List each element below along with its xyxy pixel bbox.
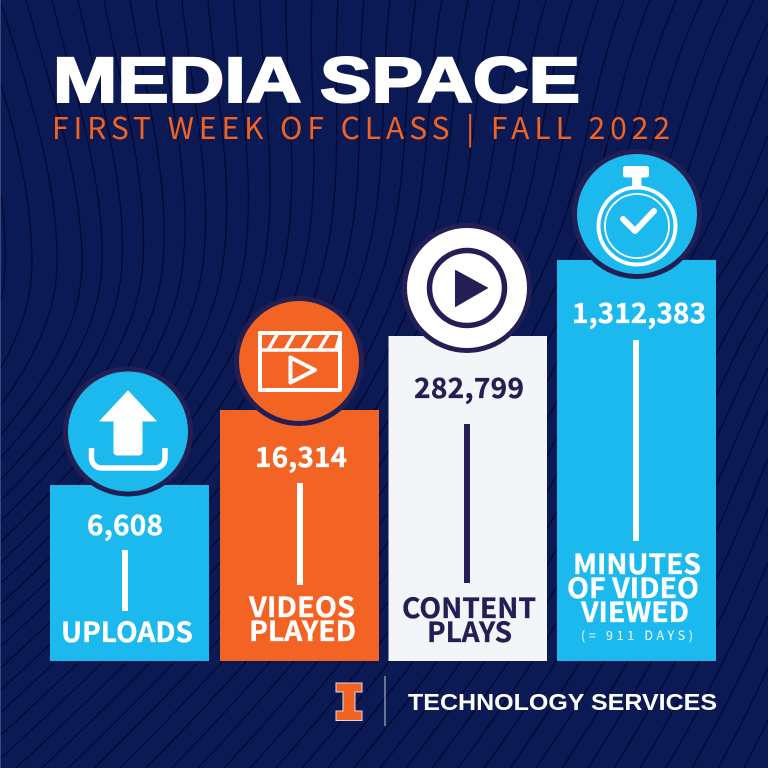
- connector: videos played: [297, 483, 303, 585]
- label: content plays: CONTENT: [402, 587, 536, 627]
- value: content plays: 282,799: [414, 367, 524, 407]
- icon: play button: [404, 226, 530, 350]
- footer logo: block I: [336, 683, 362, 720]
- value: uploads: 6,608: [87, 504, 163, 544]
- label: uploads: UPLOADS: [61, 611, 193, 651]
- connector: uploads: [122, 550, 128, 611]
- label: minutes viewed: VIEWED: [580, 591, 689, 631]
- label: minutes viewed: OF VIDEO: [567, 567, 699, 607]
- panel: minutes viewed: [557, 152, 716, 661]
- footer text: TECHNOLOGY SERVICES: [408, 689, 717, 715]
- label: videos played: PLAYED: [249, 610, 356, 650]
- panel: uploads: [50, 369, 209, 661]
- icon: upload: [66, 369, 190, 494]
- label: videos played: [248, 586, 356, 650]
- icon: video clapper: [236, 298, 362, 424]
- value: minutes viewed: 1,312,383: [572, 292, 706, 332]
- connector: minutes viewed: [633, 340, 639, 541]
- subtitle: FIRST WEEK OF CLASS | FALL 2022: [52, 104, 670, 148]
- panel: videos played: [220, 298, 379, 661]
- label: content plays: [402, 587, 536, 651]
- label: minutes viewed: MINUTES: [573, 543, 701, 583]
- note: equivalent days: (= 911 DAYS): [581, 625, 693, 644]
- title: MEDIA SPACE: [53, 44, 580, 116]
- label: content plays: PLAYS: [427, 611, 512, 651]
- label: minutes viewed: [567, 543, 701, 631]
- icon: stopwatch: [574, 152, 700, 276]
- value: videos played: 16,314: [255, 436, 347, 476]
- footer divider: [384, 676, 386, 726]
- panel: content plays: [388, 226, 547, 661]
- connector: content plays: [464, 424, 470, 583]
- label: videos played: VIDEOS: [248, 586, 355, 626]
